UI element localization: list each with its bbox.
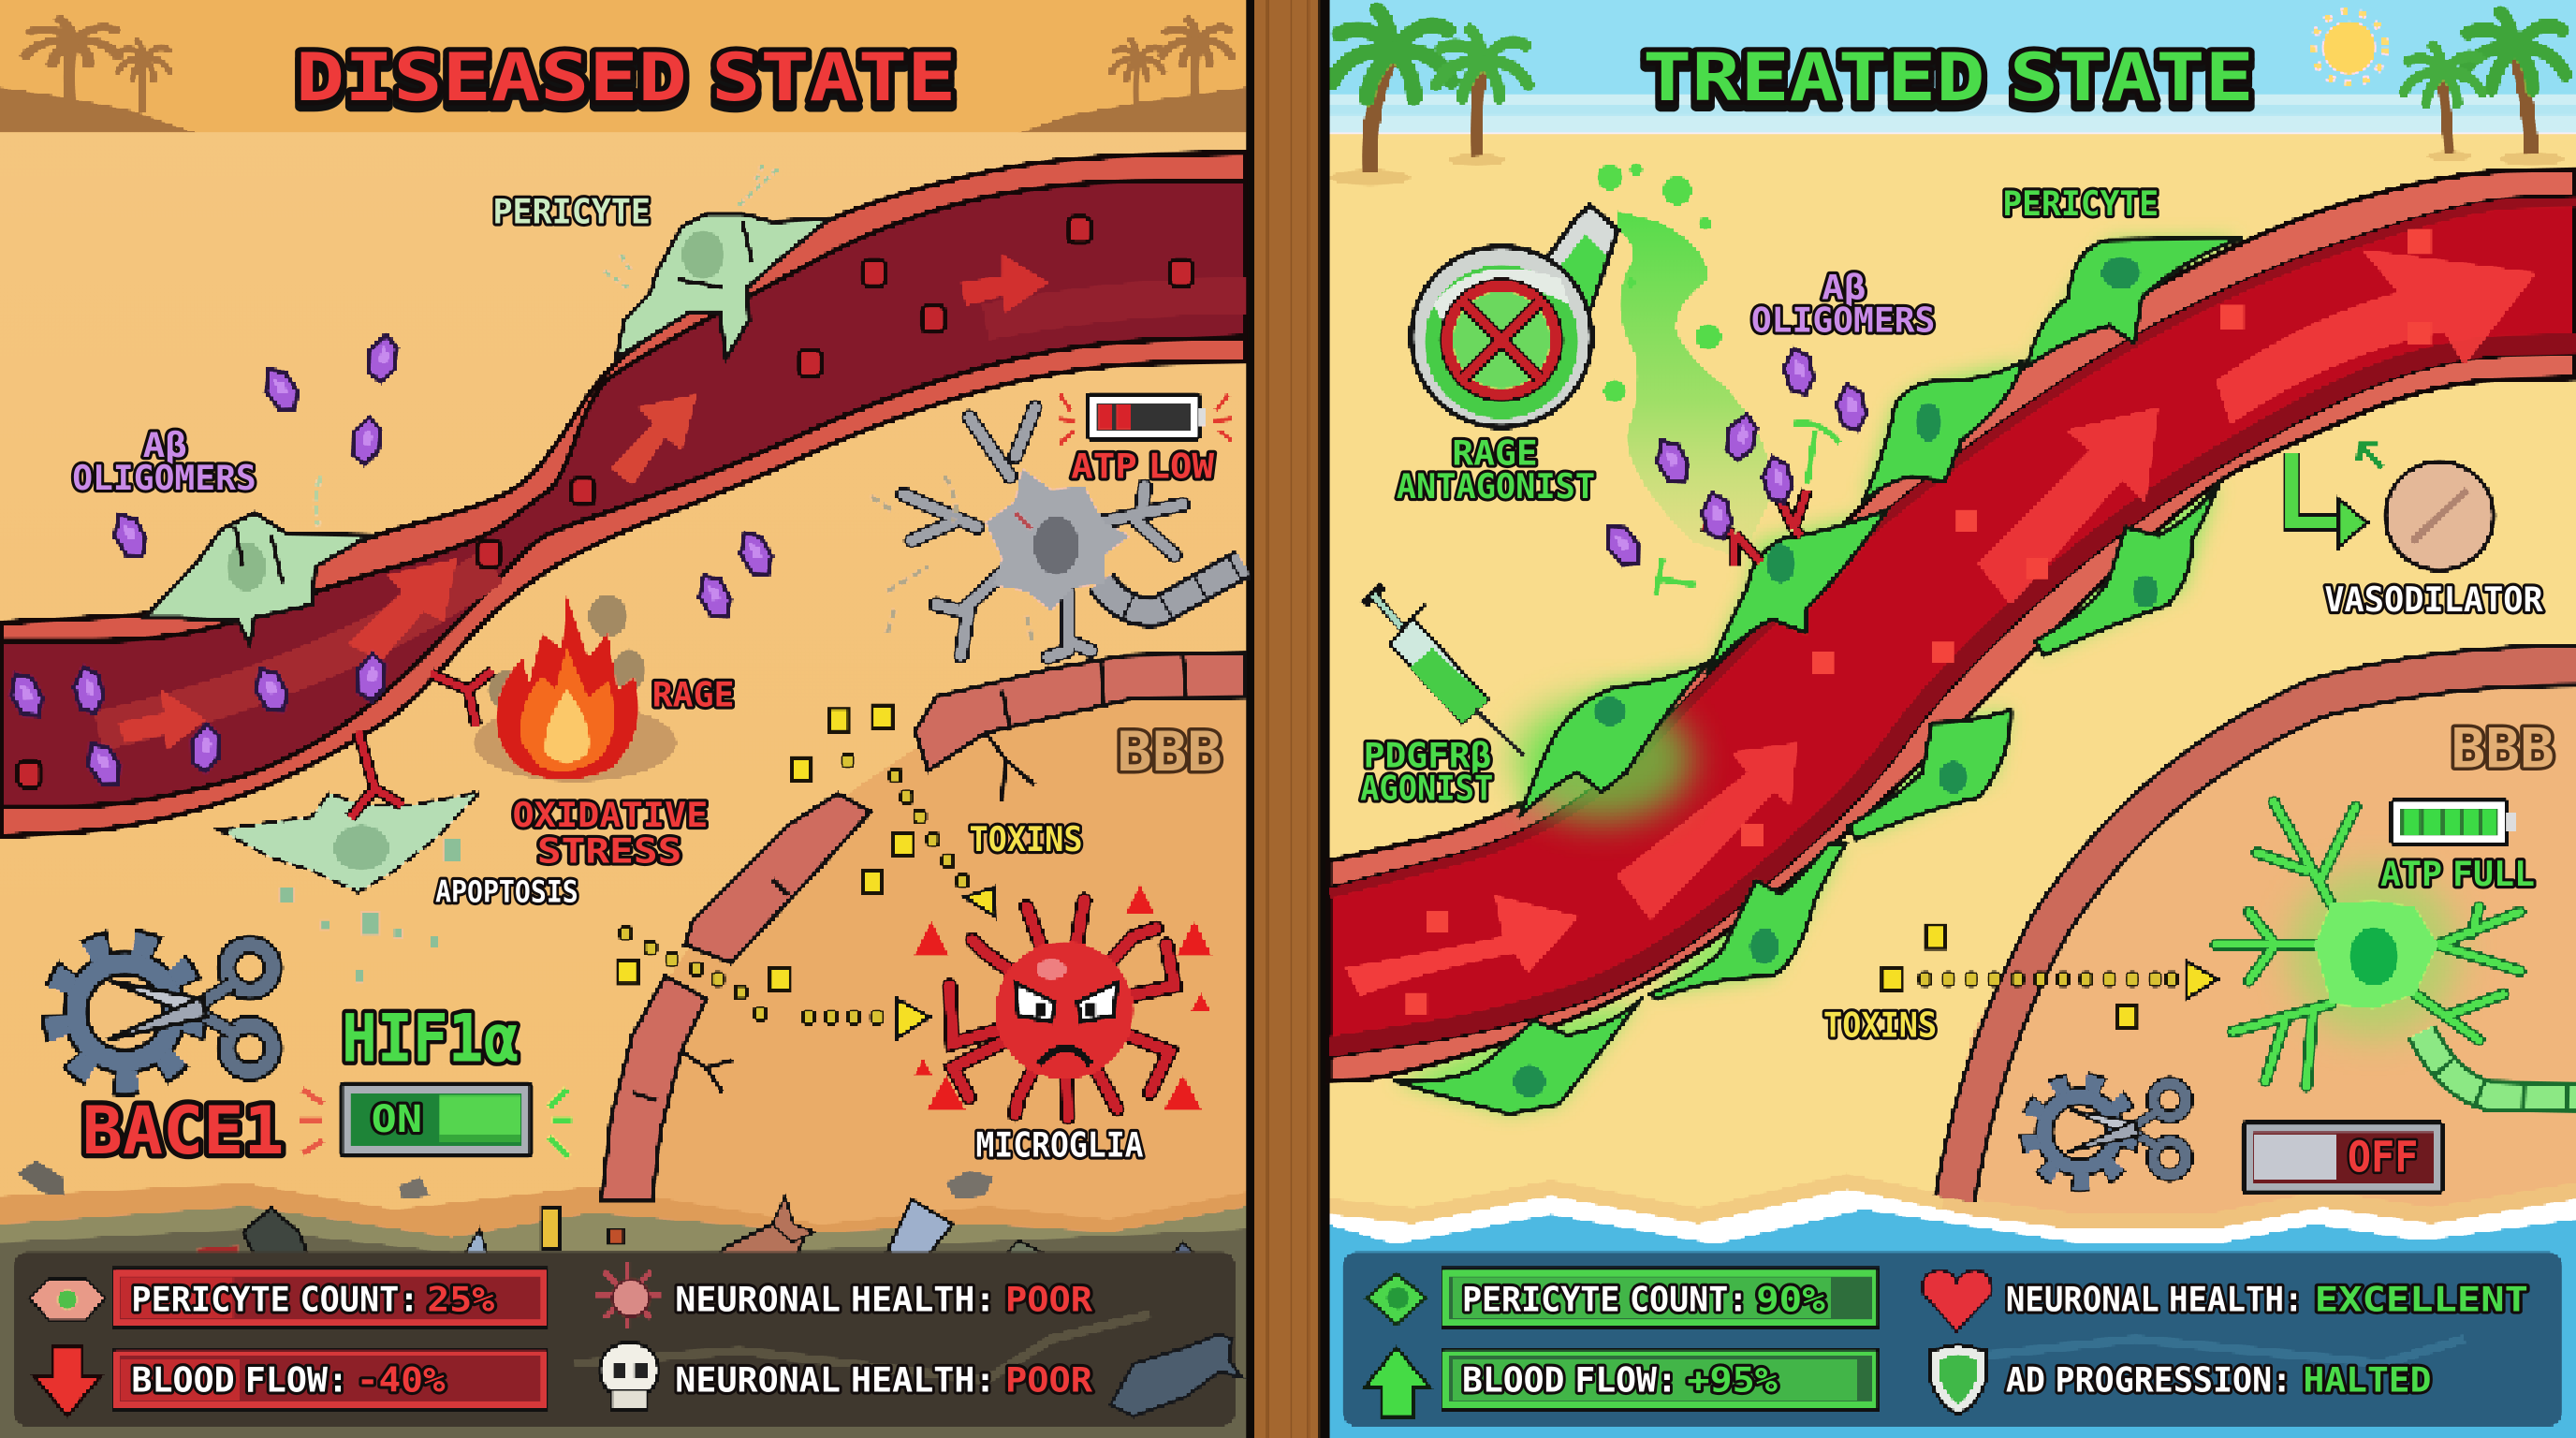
blood vessel: diseased [0,153,1245,836]
stat: blood flow treated: BLOOD FLOW: [1462,1359,1677,1400]
pericyte [2027,238,2241,366]
arrowhead [964,888,996,917]
stat value: HALTED [2304,1359,2431,1400]
toxins crossing barrier [618,705,996,1038]
blood cell squares [1406,230,2431,1016]
icon: vasodilator arrows [2291,444,2382,547]
brain side of barrier [1939,649,2576,1249]
label: agonist: AGONIST [1360,769,1493,809]
icon: inactive BACE1 gear and scissors [2030,1082,2187,1181]
pericytes: diseased [144,165,829,982]
icon: skull [600,1343,659,1410]
icon: palm tree [1329,10,1451,186]
label: rage: RAGE [1452,433,1538,474]
bar: pericyte count [113,1269,547,1328]
blood vessel: treated [1329,169,2576,1081]
arrowhead [2187,961,2217,999]
arrow [118,690,205,749]
stat: neuronal health treated: NEURONAL HEALTH: [2006,1279,2304,1319]
drug mist stream [1597,163,1774,559]
icon: red down arrow [35,1347,100,1416]
block mark [1793,423,1840,485]
label: antagonist: ANTAGONIST [1397,466,1595,506]
pericyte apoptosis [218,792,479,982]
toggle switch OFF [2241,1121,2444,1195]
icon: silhouette palm left [26,20,118,102]
stat value: -40% [357,1359,446,1400]
label: PDGFR beta: PDGFRβ [1364,736,1492,776]
icon: syringe [1364,585,1525,756]
stat: pericyte count diseased: PERICYTE COUNT: [131,1279,419,1319]
icon: green up arrow [1365,1347,1429,1416]
wood divider [1245,0,1331,1438]
title: diseased: DISEASED STATE [296,39,956,116]
pericytes: treated [1395,238,2241,1114]
label: RAGE: RAGE [652,675,734,715]
icon: palm tree [2462,12,2566,167]
label: pericyte treated: PERICYTE [2002,183,2159,224]
pericyte upper [605,165,829,359]
damaged neuron [871,407,1244,657]
pericyte [1706,509,1887,674]
warning triangles [914,884,1212,1110]
pericyte [2035,483,2219,655]
amyloid beta oligomers and blocked receptors [1600,348,1866,594]
toxins blocked [1882,925,2217,1029]
icon: silhouette palm right [1163,20,1232,102]
stat: AD progression: AD PROGRESSION: [2006,1359,2291,1400]
label: vasodilator: VASODILATOR [2324,580,2544,620]
stat: pericyte count treated: PERICYTE COUNT: [1462,1279,1748,1319]
bar: blood flow [113,1349,547,1410]
debris on shore [17,1160,1208,1314]
stats panel: diseased [13,1252,1242,1426]
icon: silhouette palm right small [1112,41,1164,111]
pericyte: agonist target [1519,662,1708,816]
HIF1a toggle switch ON [299,1081,572,1158]
stat: blood flow diseased: BLOOD FLOW: [131,1359,348,1400]
polluted shoreline [0,1183,1249,1438]
icon: vasodilator pill [2385,462,2494,570]
label: toxins treated: TOXINS [1823,1005,1937,1045]
stat value: 25% [427,1279,494,1319]
arrow [348,559,457,661]
panel: treated state background [1327,0,2576,1438]
glow at agonist site [1512,697,1692,822]
label: BACE1: BACE1 [82,1093,285,1169]
icon: dead fish [707,1196,814,1314]
pericyte glow under vessel [1395,238,2241,1114]
pericyte [1863,361,2022,501]
icon: shield [1930,1344,1986,1415]
stat: neuronal health: NEURONAL HEALTH: [675,1279,996,1319]
oxidative stress flame [473,594,677,782]
icon: RAGE antagonist flask [1412,205,1618,427]
arrow [611,394,696,485]
icon: healthy pericyte [1367,1273,1426,1325]
icon: palm tree [1436,30,1529,167]
icon: palm tree [2404,46,2481,162]
brain side of barrier [607,649,1249,1249]
stat value: +95% [1687,1359,1778,1400]
label: pericyte: PERICYTE [492,192,651,232]
label: A-beta treated: Aβ [1822,267,1866,307]
label: oligomers treated: OLIGOMERS [1751,301,1935,341]
stat value: 90% [1756,1279,1825,1319]
pericyte [1848,710,2011,840]
icon: damaged pericyte [30,1278,105,1321]
icon: heart [1923,1270,1992,1331]
flow arrow [1978,407,2159,605]
bar: pericyte count [1442,1269,1878,1328]
label: BBB: BBB [1117,720,1222,784]
label: ON: ON [372,1097,422,1141]
panel: diseased state background [0,0,1249,1438]
label: toxins: TOXINS [969,819,1083,859]
amyloid beta oligomers: diseased [6,331,776,791]
flow arrow [1617,742,1797,920]
stat value: POOR [1005,1359,1093,1400]
arrowhead [897,999,929,1038]
icon: spiky neuron [594,1262,661,1328]
arrow [961,255,1048,312]
red blood cells [18,217,1193,787]
stat: neuronal health: NEURONAL HEALTH: [675,1359,996,1400]
RAGE receptors [350,670,492,818]
pericyte left [144,477,370,644]
broken blood-brain barrier [601,653,1245,1201]
pericyte [1649,843,1847,999]
label: apoptosis: APOPTOSIS [435,875,578,909]
stat value: POOR [1005,1279,1093,1319]
block mark [1656,559,1695,594]
stats panel: treated [1342,1252,2563,1426]
label: oxidative: OXIDATIVE [513,795,708,835]
pericyte [1395,999,1641,1114]
angry face [1016,982,1117,1064]
title: treated: TREATED STATE [1643,39,2254,116]
stat value: EXCELLENT [2315,1279,2528,1319]
flow arrow [1345,895,1579,996]
bar: blood flow [1442,1349,1878,1410]
label: ATP low: ATP LOW [1071,447,1215,487]
label: microglia: MICROGLIA [975,1125,1143,1166]
icon: low battery [1058,394,1232,444]
shoreline [1327,1173,2576,1249]
icon: silhouette palm left small [118,41,169,111]
receptor [1702,479,1807,566]
label: HIF1 alpha: HIF1α [342,1001,520,1078]
label: ATP full: ATP FULL [2380,854,2535,894]
label: BBB treated: BBB [2451,717,2554,781]
label: oligomers: OLIGOMERS [72,458,256,498]
flow arrow [2216,250,2537,424]
icon: sun [2313,11,2385,84]
angry microglia [914,884,1212,1117]
label: stress: STRESS [537,830,681,871]
intact blood-brain barrier [1954,666,2576,1199]
icon: dead fish [1110,1334,1242,1416]
label: OFF: OFF [2348,1132,2418,1181]
icon: BACE1 gear and scissors [56,943,272,1081]
label: A-beta: Aβ [143,425,187,465]
icon: dead fish [887,1199,953,1265]
healthy neuron [2216,801,2576,1097]
icon: full battery [2392,800,2517,844]
